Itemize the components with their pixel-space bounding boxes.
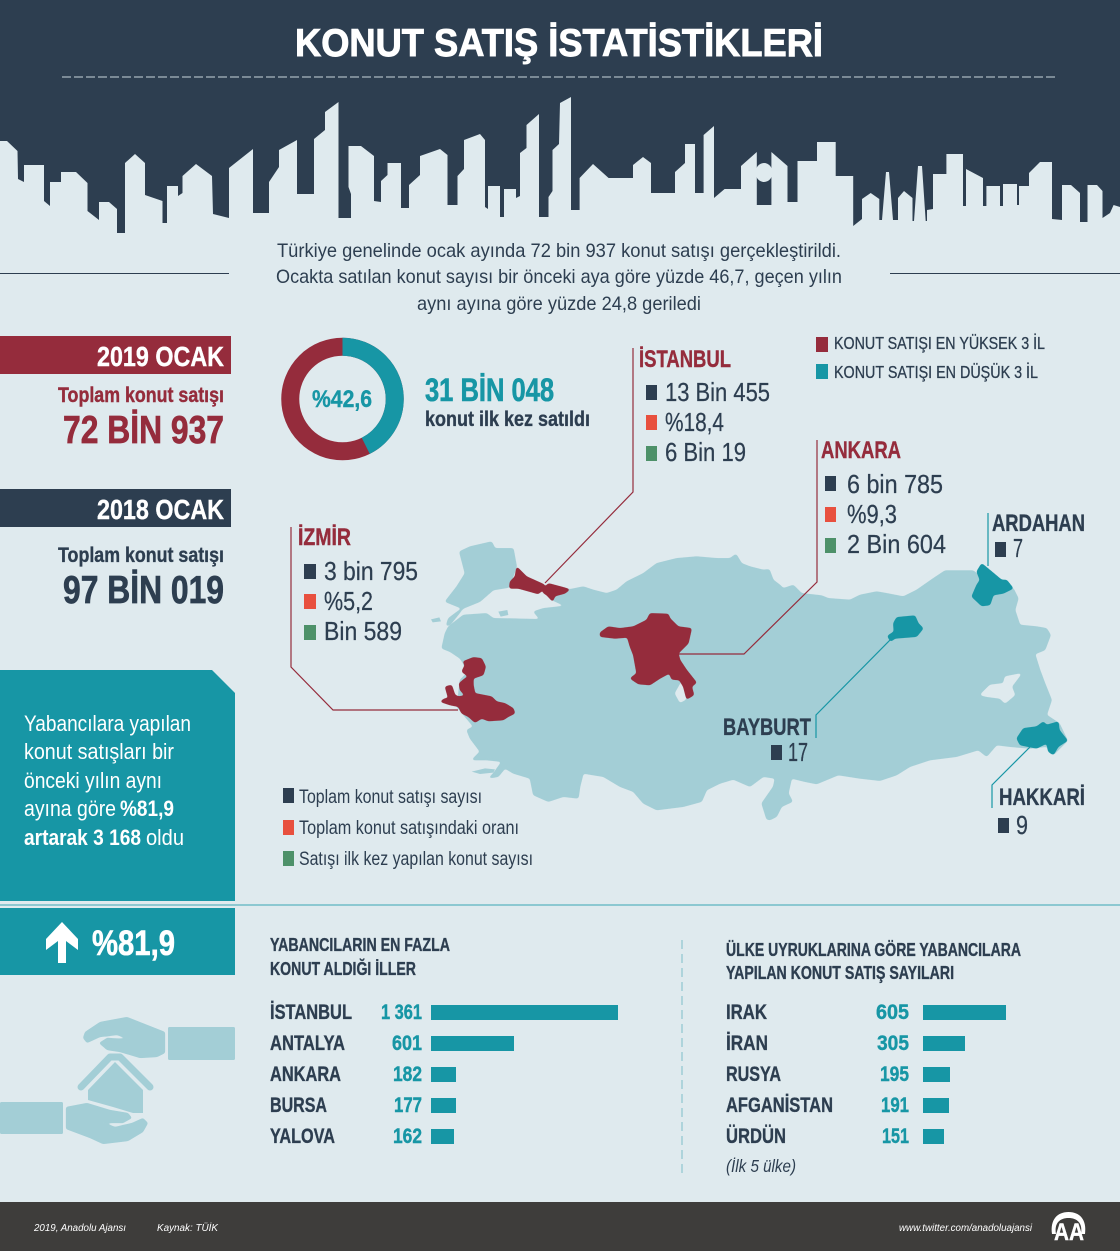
panel: foreign sales note: Yabancılara yapılan (24, 711, 191, 736)
label: Istanbul (639, 346, 770, 467)
bar chart: provinces: 1 361 (381, 1001, 422, 1024)
panel: foreign sales note: ayına göre (24, 796, 116, 821)
label: Hakkari: 9 (1016, 810, 1028, 840)
lake: Van (980, 673, 1022, 703)
label: Istanbul: İSTANBUL (639, 346, 731, 373)
label: Ankara: %9,3 (847, 499, 897, 529)
map legend: top (816, 333, 1045, 382)
label: Bayburt: BAYBURT (723, 714, 811, 741)
map of Turkey (431, 542, 1068, 820)
bar chart: countries (726, 940, 1021, 1176)
leader line: Bayburt (816, 640, 890, 738)
icon: AA logo: AA (1054, 1219, 1084, 1246)
panel: 2018 ocak: 97 BİN 019 (63, 569, 224, 612)
donut chart: %42,6 (312, 386, 372, 413)
province: Izmir (440, 657, 515, 723)
leader line: Ardahan (987, 513, 989, 566)
label: Ankara: 6 bin 785 (847, 469, 943, 499)
map legend: bottom (283, 787, 533, 870)
panel: 2019 ocak: 2019 OCAK (97, 341, 224, 372)
icon: up arrow (46, 922, 78, 963)
label: Istanbul: 6 Bin 19 (665, 437, 746, 467)
chart heading: ÜLKE UYRUKLARINA GÖRE YABANCILARA (726, 940, 1021, 960)
map legend: bottom: Toplam konut satışındaki oranı (299, 818, 519, 839)
leader line: Izmir (291, 527, 458, 710)
province: Ardahan (972, 563, 1013, 606)
panel: foreign sales note: konut satışları bir (24, 739, 174, 764)
panel: 2019 ocak (0, 336, 231, 452)
panel: foreign sales note: oldu (146, 825, 184, 850)
bar chart: provinces: ANTALYA (270, 1032, 345, 1055)
label: Ardahan: 7 (1013, 533, 1023, 563)
label: Ardahan: ARDAHAN (992, 510, 1085, 537)
label: Ankara: 2 Bin 604 (847, 529, 946, 559)
bar chart: provinces: 177 (394, 1094, 422, 1117)
province: Bayburt (887, 616, 923, 642)
chart heading: YABANCILARIN EN FAZLA (270, 935, 450, 955)
chart heading (726, 940, 1021, 983)
label: Izmir: %5,2 (324, 586, 373, 616)
map legend: top: KONUT SATIŞI EN YÜKSEK 3 İL (834, 333, 1045, 353)
footer: www.twitter.com/anadoluajansi (899, 1223, 1033, 1234)
province: Istanbul (509, 567, 570, 602)
bar chart: provinces: 162 (393, 1125, 422, 1148)
panel: 2018 ocak (0, 489, 231, 612)
province: Hakkari (1017, 722, 1068, 755)
intro text: Türkiye genelinde ocak ayında 72 bin 937 konut satışı gerçekleştirildi. (277, 240, 841, 262)
label: Izmir: İZMİR (298, 524, 351, 551)
panel: foreign sales note: artarak 3 168 (24, 825, 141, 850)
panel: 2018 ocak: Toplam konut satışı (58, 544, 224, 567)
label: Bayburt: 17 (788, 737, 808, 767)
icon: AA logo (1052, 1212, 1085, 1246)
bar chart: countries: RUSYA (726, 1063, 781, 1086)
leader line: Istanbul (545, 348, 633, 583)
label: Izmir: 3 bin 795 (324, 556, 418, 586)
bar chart: provinces: İSTANBUL (270, 1001, 352, 1024)
panel: foreign sales note: önceki yılın aynı (24, 768, 162, 793)
bar chart: countries: 191 (881, 1094, 909, 1117)
panel: 2019 ocak: 72 BİN 937 (63, 409, 224, 452)
first-time sales callout: 31 BİN 048 (425, 372, 554, 408)
bar chart: countries: IRAK (726, 1001, 767, 1024)
label: Hakkari: HAKKARİ (999, 784, 1085, 811)
label: Bayburt (723, 714, 811, 767)
bar chart: provinces: BURSA (270, 1094, 327, 1117)
intro text: Ocakta satılan konut sayısı bir önceki aya göre yüzde 46,7, geçen yılın (276, 266, 842, 288)
intro text (276, 240, 842, 315)
footnote: (İlk 5 ülke) (726, 1156, 796, 1176)
map legend: bottom: Satışı ilk kez yapılan konut sayısı (299, 849, 533, 870)
label: Ankara (821, 437, 946, 559)
panel: increase band (0, 908, 235, 975)
icon: hands and house (0, 1017, 235, 1144)
label: Izmir (298, 524, 418, 646)
lake: Tuz (675, 682, 686, 703)
intro text: aynı ayına göre yüzde 24,8 geriledi (417, 293, 701, 315)
leader line: Ankara (678, 440, 817, 654)
map legend: top: KONUT SATIŞI EN DÜŞÜK 3 İL (834, 362, 1038, 382)
header skyline (0, 0, 1120, 233)
panel: foreign sales note (0, 670, 235, 901)
chart heading (270, 935, 450, 979)
label: Ardahan (992, 510, 1085, 563)
map legend: bottom: Toplam konut satışı sayısı (299, 787, 482, 808)
title: KONUT SATIŞ İSTATİSTİKLERİ (295, 22, 823, 65)
label: Hakkari (998, 784, 1085, 840)
bar chart: provinces: ANKARA (270, 1063, 341, 1086)
panel: 2018 ocak: 2018 OCAK (97, 494, 224, 525)
province: Ankara (600, 613, 697, 699)
panel: foreign sales note: %81,9 (120, 796, 174, 821)
leader line: Hakkari (992, 747, 1030, 808)
region: islands (431, 610, 508, 774)
bar chart: countries: 151 (882, 1125, 909, 1148)
bar chart: countries: 305 (877, 1032, 909, 1055)
chart heading: KONUT ALDIĞI İLLER (270, 958, 416, 979)
bar chart: countries: ÜRDÜN (726, 1125, 786, 1148)
donut chart (290, 347, 395, 451)
panel: 2019 ocak: Toplam konut satışı (58, 384, 224, 407)
bar chart: provinces: YALOVA (270, 1125, 335, 1148)
label: Ankara: ANKARA (821, 437, 901, 464)
bar chart: countries: AFGANİSTAN (726, 1094, 833, 1117)
first-time sales callout (425, 372, 590, 431)
chart heading: YAPILAN KONUT SATIŞ SAYILARI (726, 963, 954, 983)
bar chart: provinces: 182 (393, 1063, 422, 1086)
region: Anatolia (442, 554, 1068, 820)
footer: Kaynak: TÜİK (157, 1222, 219, 1234)
panel: increase band: %81,9 (92, 924, 175, 963)
bar chart: provinces: 601 (392, 1032, 422, 1055)
label: Izmir: Bin 589 (324, 616, 402, 646)
footer (0, 1202, 1120, 1251)
first-time sales callout: konut ilk kez satıldı (425, 408, 590, 431)
bar chart: countries: İRAN (726, 1032, 768, 1055)
bar chart: provinces (270, 935, 618, 1148)
bar chart: countries: 605 (876, 1001, 909, 1024)
label: Istanbul: %18,4 (665, 407, 724, 437)
label: Istanbul: 13 Bin 455 (665, 377, 770, 407)
region: Thrace (445, 542, 517, 626)
footer: 2019, Anadolu Ajansı (33, 1223, 126, 1234)
bar chart: countries: 195 (880, 1063, 909, 1086)
